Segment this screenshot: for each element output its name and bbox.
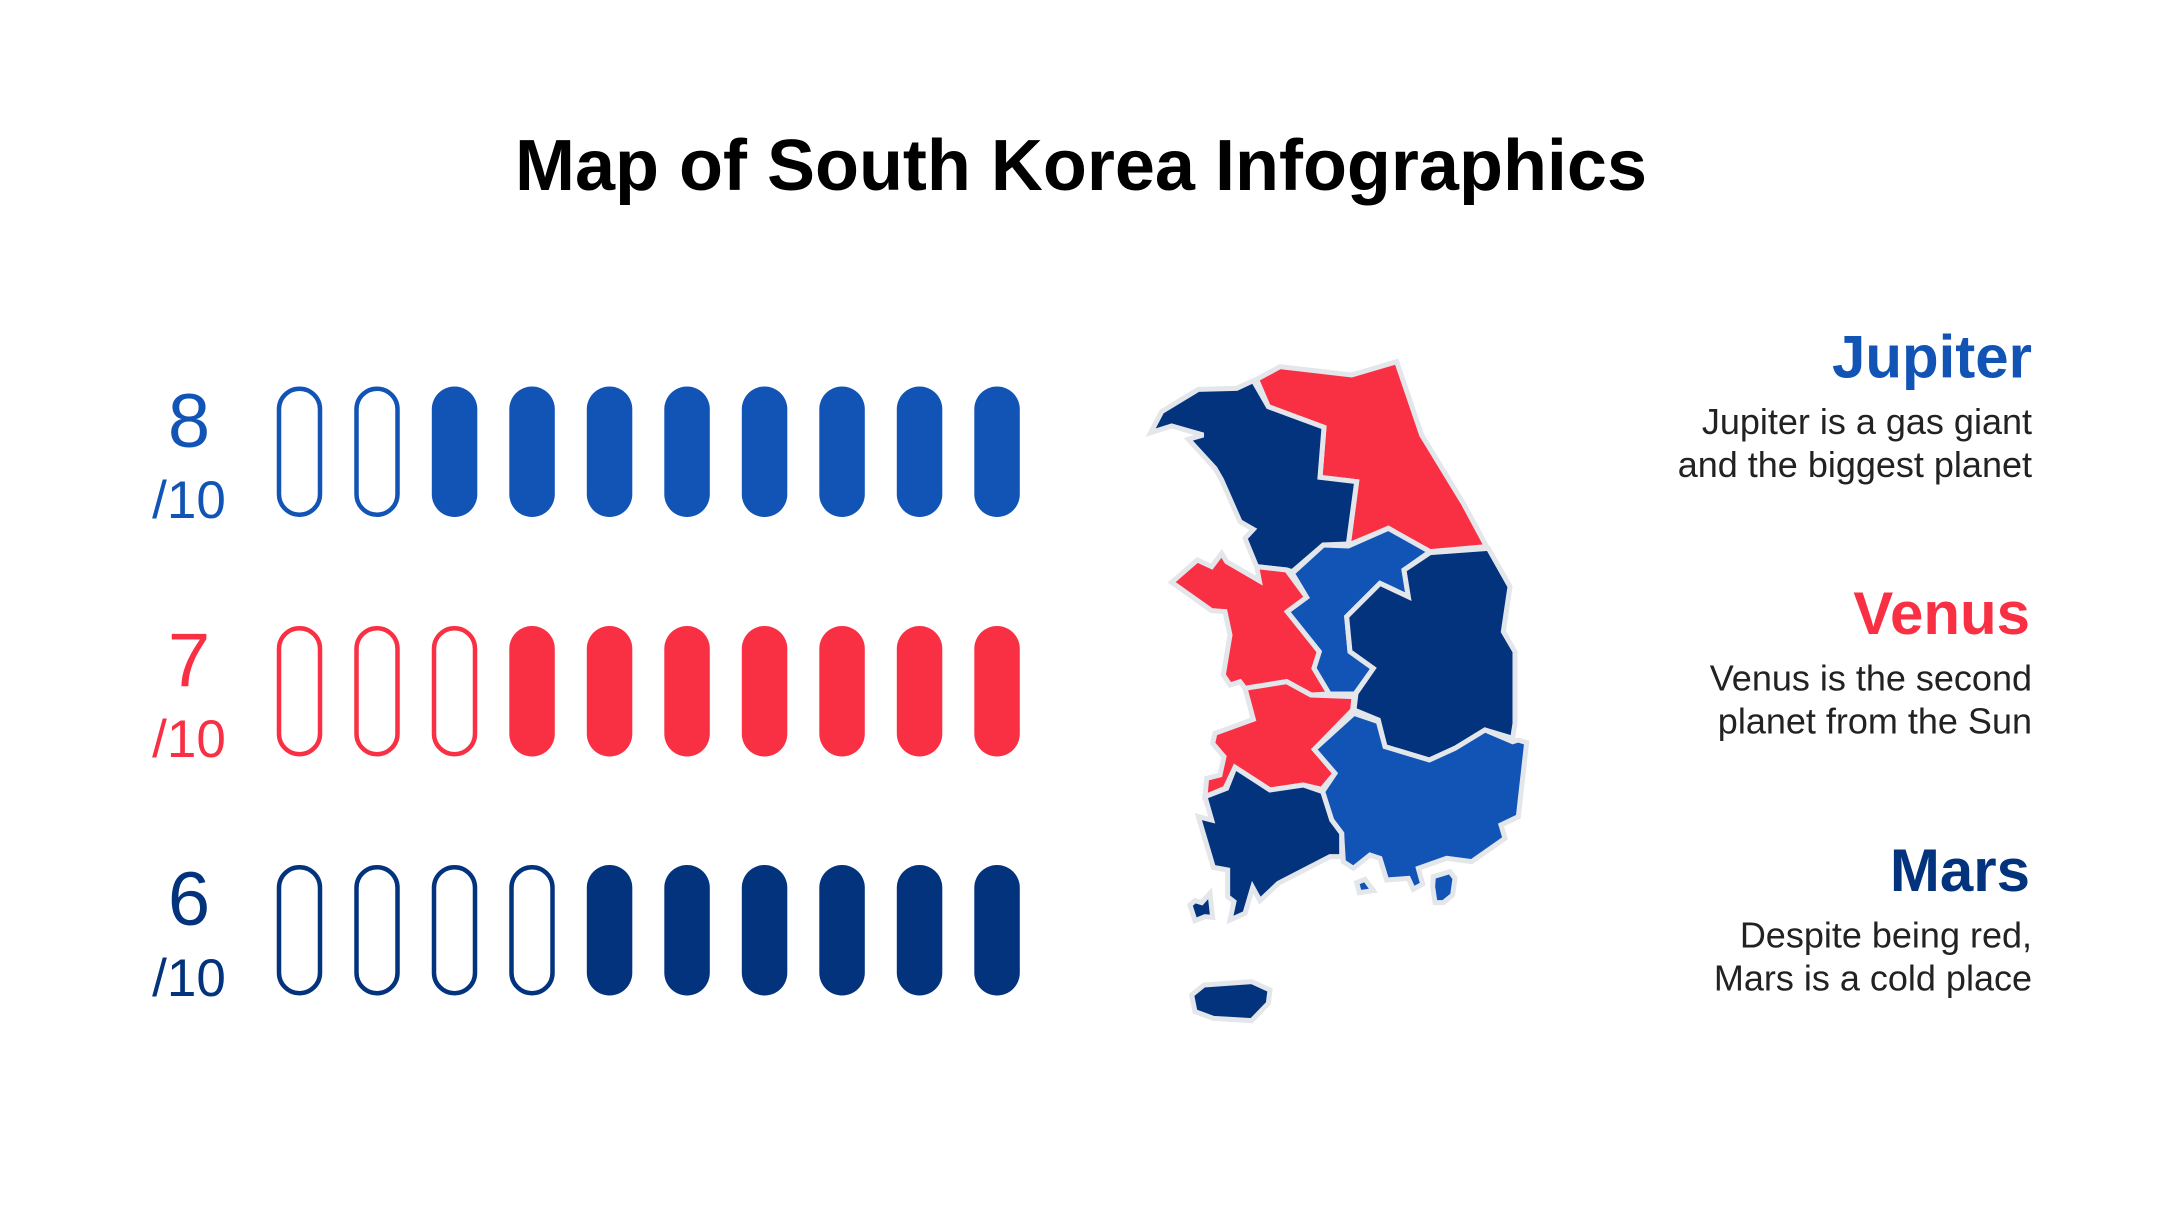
score: 7/10: 7 <box>168 618 210 703</box>
rating row: Venus 7/10 <box>152 618 1020 769</box>
island: blue <box>1433 872 1455 903</box>
legend: Mars: Mars is a cold place <box>1714 958 2032 998</box>
score: 6/10: 6 <box>168 857 210 942</box>
pills: 4 empty, 6 filled <box>279 865 1020 996</box>
legend: Jupiter <box>1678 324 2032 485</box>
rating row: Jupiter 8/10 <box>152 379 1020 530</box>
score: 7/10 <box>152 618 226 769</box>
map of South Korea <box>1151 362 1527 1021</box>
score: 8/10: 8 <box>168 379 210 464</box>
rating row: Mars 6/10 <box>152 857 1020 1008</box>
score: 6/10 <box>152 857 226 1008</box>
region: north-west, navy <box>1151 381 1357 572</box>
score: 8/10: /10 <box>152 471 226 530</box>
score: 7/10: /10 <box>152 710 226 769</box>
region: south-east, blue <box>1314 713 1527 889</box>
legend: Venus <box>1710 580 2032 742</box>
score: 6/10: /10 <box>152 949 226 1008</box>
legend: Jupiter: Jupiter is a gas giant <box>1702 401 2032 442</box>
island: Jeju, navy <box>1192 982 1270 1021</box>
region: north-east, red <box>1257 362 1487 552</box>
legend: Venus: planet from the Sun <box>1718 700 2032 742</box>
region: south-central-west, red <box>1205 682 1354 797</box>
region: central-west, red <box>1172 553 1329 695</box>
legend: Mars <box>1714 837 2032 998</box>
region: east, navy <box>1347 548 1515 760</box>
legend: Jupiter: and the biggest planet <box>1678 444 2032 485</box>
score: 8/10 <box>152 379 226 530</box>
legend: Venus: Venus is the second <box>1710 658 2032 698</box>
legend: Venus: Venus <box>1853 580 2030 647</box>
region: south-west, navy <box>1198 767 1342 920</box>
legend: Jupiter: Jupiter <box>1832 324 2032 390</box>
island: small navy <box>1190 893 1213 921</box>
island: small blue <box>1357 879 1373 893</box>
legend: Mars: Mars <box>1890 837 2030 904</box>
region: central, blue <box>1287 528 1430 694</box>
pills: 2 empty, 8 filled <box>279 386 1020 517</box>
legend: Mars: Despite being red, <box>1740 914 2032 956</box>
pills: 3 empty, 7 filled <box>279 626 1020 756</box>
title: Map of South Korea Infographics <box>515 126 1647 206</box>
